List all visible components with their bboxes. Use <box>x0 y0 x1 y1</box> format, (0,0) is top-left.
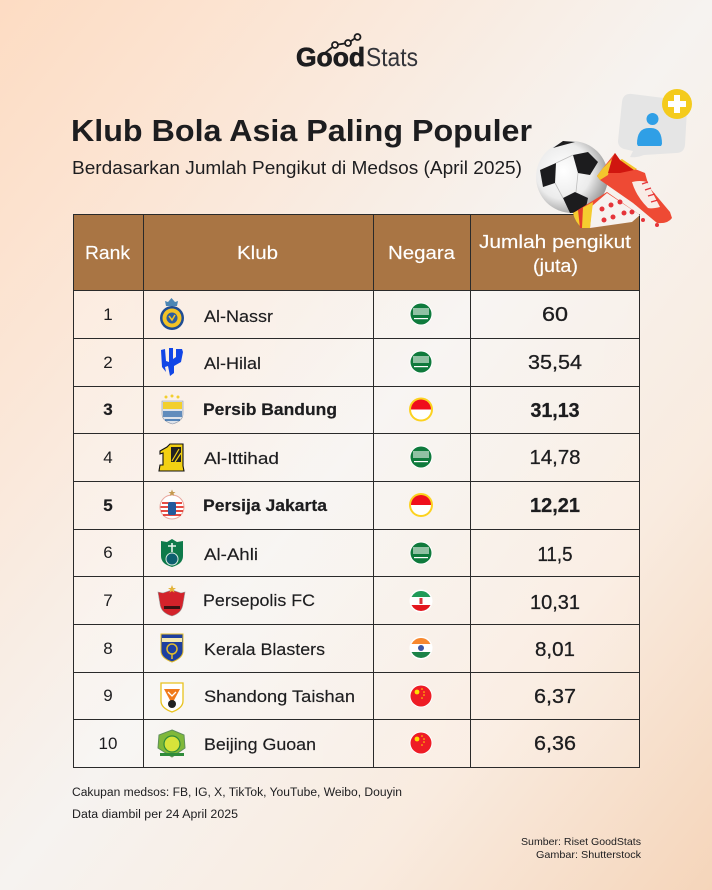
row 4: Al-Ittihad <box>103 444 580 471</box>
badge: Al-Ahli <box>161 539 183 567</box>
row 7: Persepolis FC: Persepolis FC <box>203 591 315 610</box>
row 8: Kerala Blasters <box>103 634 575 662</box>
row 10: Beijing Guoan <box>99 730 576 757</box>
badge: Al-Hilal <box>161 348 183 376</box>
row 6: Al-Ahli <box>103 539 572 567</box>
footnote: Data diambil per 24 April 2025 <box>72 809 238 821</box>
row 4: Al-Ittihad: Al-Ittihad <box>204 449 279 468</box>
icon: upper football boot <box>597 153 672 227</box>
flag: Iran <box>410 590 432 612</box>
footnote: Cakupan medsos: FB, IG, X, TikTok, YouTube, Weibo, Douyin <box>72 787 402 799</box>
row 3: Persib Bandung: 3 <box>103 400 113 419</box>
table header: Negara <box>388 243 456 263</box>
icon: profile speech bubble with plus <box>618 89 692 157</box>
row 7: Persepolis FC <box>103 585 580 616</box>
table header: Klub <box>237 243 278 263</box>
row 6: Al-Ahli: Al-Ahli <box>204 545 258 564</box>
source credit: Gambar: Shutterstock <box>536 849 642 861</box>
row 10: Beijing Guoan: 10 <box>99 734 117 753</box>
badge: Kerala Blasters <box>161 634 183 662</box>
badge: Persija <box>160 490 184 519</box>
row 5: Persija Jakarta: 5 <box>103 496 113 515</box>
badge: Persib <box>162 394 183 424</box>
source credit <box>521 836 642 861</box>
row 9: Shandong Taishan: 9 <box>103 686 113 705</box>
row 8: Kerala Blasters: 8,01 <box>535 639 575 661</box>
row 9: Shandong Taishan <box>103 683 576 712</box>
row 7: Persepolis FC: 7 <box>103 591 113 610</box>
flag: Saudi Arabia <box>410 542 432 564</box>
table header <box>73 214 640 290</box>
row 6: Al-Ahli: 6 <box>103 543 113 562</box>
row 3: Persib Bandung: Persib Bandung <box>203 400 337 419</box>
row 9: Shandong Taishan: 6,37 <box>534 686 576 708</box>
flag: Saudi Arabia <box>410 302 432 326</box>
row 2: Al-Hilal: Al-Hilal <box>204 354 261 373</box>
source credit: Sumber: Riset GoodStats <box>521 836 641 848</box>
row 7: Persepolis FC: 10,31 <box>530 592 580 614</box>
row 3: Persib Bandung <box>103 394 580 424</box>
row 10: Beijing Guoan: Beijing Guoan <box>204 735 316 754</box>
row 6: Al-Ahli: 11,5 <box>538 544 572 566</box>
row 1: Al-Nassr: 1 <box>103 305 113 324</box>
row 2: Al-Hilal: 35,54 <box>528 352 582 374</box>
logo: GoodStats <box>296 34 418 72</box>
title: Klub Bola Asia Paling Populer <box>71 113 532 148</box>
table header: Rank <box>85 243 131 263</box>
flag: China <box>410 732 432 754</box>
badge: Al-Nassr <box>160 298 184 330</box>
row 2: Al-Hilal <box>103 348 582 376</box>
row 4: Al-Ittihad: 14,78 <box>530 447 580 469</box>
row 1: Al-Nassr: 60 <box>542 304 568 326</box>
flag: Indonesia <box>409 398 433 422</box>
table header: Jumlah pengikut <box>479 232 631 252</box>
badge: Al-Ittihad <box>159 444 184 471</box>
table header: (juta) <box>533 256 578 276</box>
logo: GoodStats: Stats <box>366 42 418 72</box>
row 4: Al-Ittihad: 4 <box>103 448 113 467</box>
row 5: Persija Jakarta: 12,21 <box>530 495 580 517</box>
row 8: Kerala Blasters: Kerala Blasters <box>204 640 325 659</box>
logo: GoodStats: Good <box>296 42 365 72</box>
subtitle: Berdasarkan Jumlah Pengikut di Medsos (April 2025) <box>72 158 522 178</box>
flag: Indonesia <box>409 493 433 517</box>
row 5: Persija Jakarta: Persija Jakarta <box>203 496 328 515</box>
badge: Shandong Taishan <box>161 683 183 712</box>
badge: Beijing Guoan <box>158 730 185 757</box>
table <box>73 214 640 768</box>
row 1: Al-Nassr: Al-Nassr <box>204 307 273 326</box>
icon: soccer ball <box>536 141 608 213</box>
flag: India <box>410 636 432 660</box>
row 9: Shandong Taishan: Shandong Taishan <box>204 687 355 706</box>
flag: Saudi Arabia <box>410 350 432 374</box>
footnote <box>72 787 402 821</box>
flag: China <box>410 684 432 708</box>
flag: Saudi Arabia <box>410 446 432 468</box>
icon: lower football boot <box>573 192 640 228</box>
row 2: Al-Hilal: 2 <box>103 353 113 372</box>
row 1: Al-Nassr <box>103 298 568 330</box>
row 3: Persib Bandung: 31,13 <box>530 400 580 422</box>
row 10: Beijing Guoan: 6,36 <box>534 733 576 755</box>
row 5: Persija Jakarta <box>103 490 580 519</box>
row 8: Kerala Blasters: 8 <box>103 639 113 658</box>
badge: Persepolis <box>158 585 185 616</box>
